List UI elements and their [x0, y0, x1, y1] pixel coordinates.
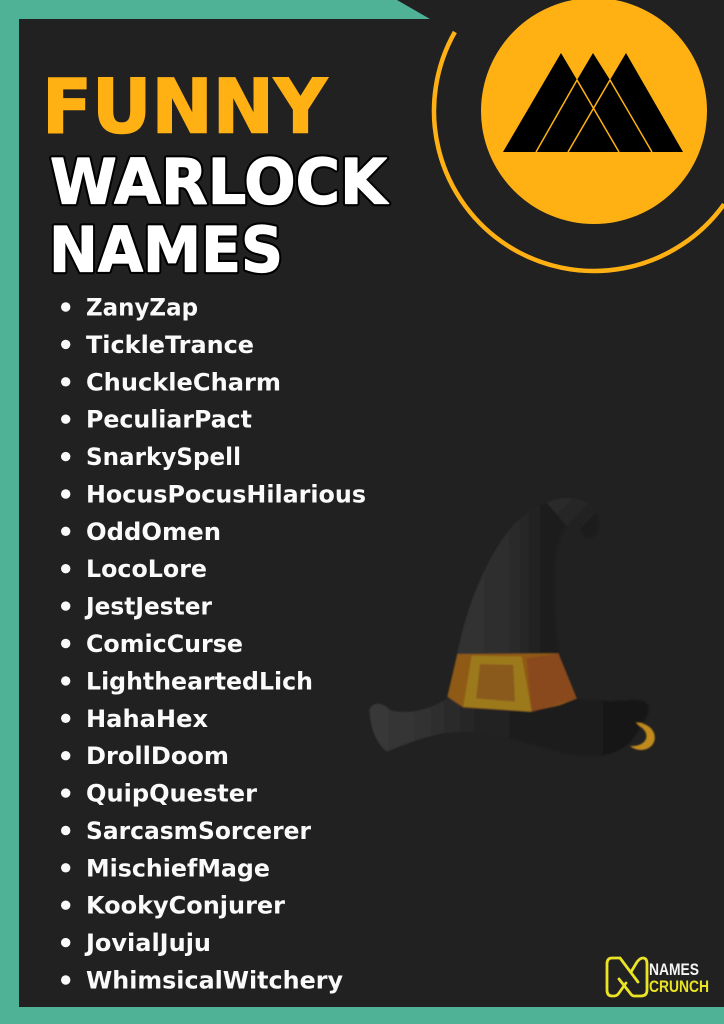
name items: HocusPocusHilarious: [86, 480, 366, 508]
buckle inner: [476, 664, 515, 702]
title word: WARLOCK: WARLOCK: [50, 146, 389, 218]
triangles emblem: [503, 53, 683, 152]
name items: SarcasmSorcerer: [86, 817, 311, 845]
gold arc ring: [434, 32, 724, 271]
logo mark: [607, 958, 647, 996]
gold circle: [481, 0, 707, 224]
icon: witch hat: [369, 498, 655, 756]
name items: KookyConjurer: [86, 892, 285, 920]
name items: ZanyZap: [86, 294, 198, 322]
title word: WARLOCK: WARLOCK: [50, 146, 389, 218]
icon: warlock emblem in gold circle: [434, 0, 724, 271]
name items: DrollDoom: [86, 742, 229, 770]
name items: HahaHex: [86, 705, 209, 733]
title word: NAMES: NAMES: [49, 214, 283, 286]
hat cone: [457, 501, 570, 657]
name items: LightheartedLich: [86, 667, 313, 695]
name items: [84, 294, 366, 994]
name items: WhimsicalWitchery: [86, 966, 343, 994]
name items: OddOmen: [86, 518, 221, 546]
title word: NAMES: NAMES: [49, 214, 283, 286]
name items: SnarkySpell: [86, 443, 241, 471]
name items: ComicCurse: [86, 630, 243, 658]
title word: FUNNY: FUNNY: [42, 62, 329, 150]
bullets: [61, 302, 70, 985]
name items: LocoLore: [86, 555, 207, 583]
buckle: [463, 656, 532, 712]
hat brim: [369, 698, 649, 756]
hat band: [447, 653, 577, 712]
logo word NAMES: NAMES: [649, 960, 699, 979]
logo: Names Crunch: [607, 958, 709, 996]
name items: MischiefMage: [86, 854, 270, 882]
hat curl top: [547, 498, 599, 538]
logo word CRUNCH: CRUNCH: [649, 977, 709, 996]
hat hook: [630, 723, 655, 750]
name items: ChuckleCharm: [86, 368, 281, 396]
names list: [61, 294, 366, 994]
name items: TickleTrance: [86, 331, 254, 359]
name items: PeculiarPact: [86, 406, 252, 434]
title: [42, 62, 389, 286]
name items: QuipQuester: [86, 780, 257, 808]
band right shade: [527, 653, 577, 712]
name items: JovialJuju: [84, 929, 211, 957]
name items: JestJester: [84, 593, 212, 621]
